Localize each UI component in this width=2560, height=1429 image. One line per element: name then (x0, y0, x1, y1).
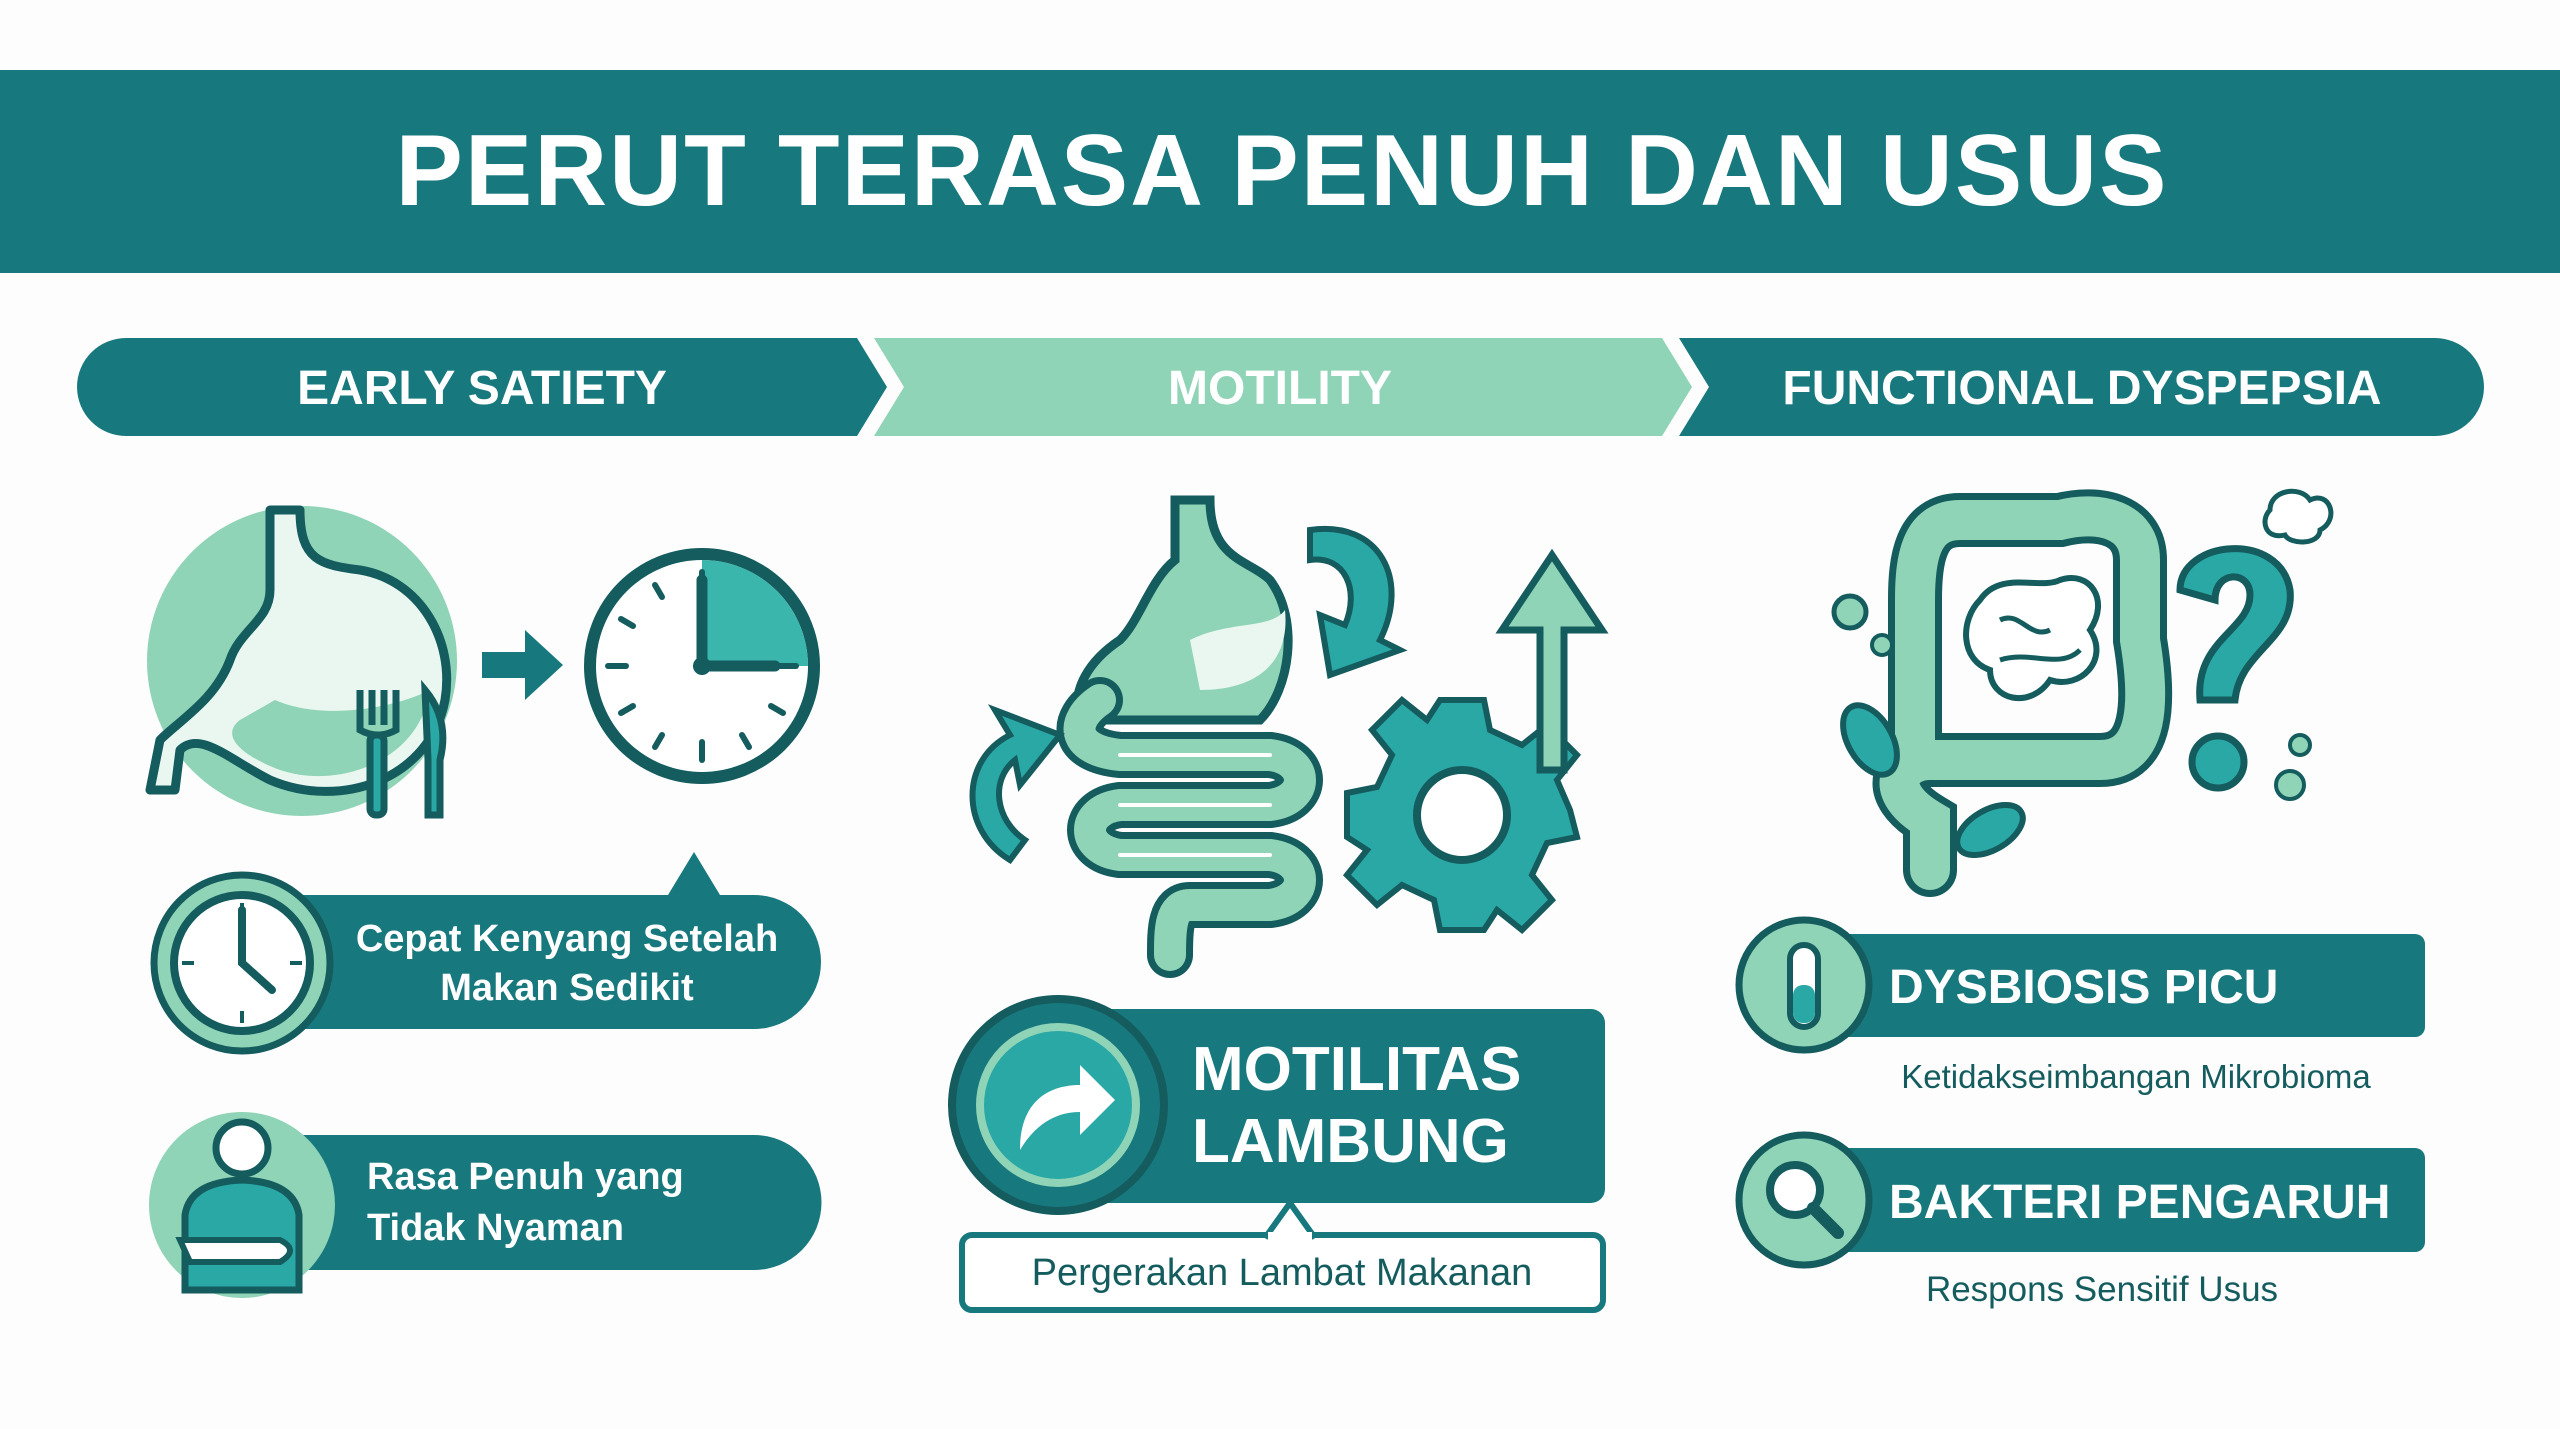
callout: motilitas lambung (952, 999, 1605, 1211)
icon: intestine with question mark and bacteria (1832, 491, 2331, 870)
text: ketidakseimbangan: Ketidakseimbangan Mikrobioma (1901, 1058, 2371, 1095)
title band (0, 70, 2560, 273)
callout: motilitas lambung: MOTILITAS (1192, 1035, 1521, 1104)
icon: small clock (154, 875, 330, 1051)
arrow: stomach to clock (482, 630, 563, 700)
chevron: motility (874, 338, 1692, 436)
chevron: early satiety: EARLY SATIETY (297, 362, 667, 415)
chevron: functional dyspepsia (1679, 338, 2484, 436)
icon: test tube (1739, 920, 1869, 1050)
pill: rasa penuh: Tidak Nyaman (367, 1207, 624, 1249)
pill: rasa penuh (149, 1112, 822, 1298)
chevron: early satiety (77, 338, 887, 436)
chevron: motility: MOTILITY (1168, 362, 1392, 415)
pill: dysbiosis picu (1739, 920, 2425, 1050)
text: respons sensitif usus: Respons Sensitif Usus (1926, 1270, 2278, 1309)
icon: stomach with cutlery (147, 506, 457, 816)
icon: stomach and intestine motility (972, 500, 1602, 955)
icon: person holding stomach (149, 1112, 335, 1298)
callout: pergerakan lambat makanan (962, 1203, 1603, 1310)
pill: rasa penuh: Rasa Penuh yang (367, 1156, 684, 1198)
pill: cepat kenyang (154, 852, 821, 1051)
icon: forward arrow circle (952, 999, 1164, 1211)
pill: bakteri pengaruh (1739, 1135, 2425, 1265)
pill: cepat kenyang: Makan Sedikit (440, 967, 694, 1009)
icon: clock (590, 554, 814, 778)
pill: cepat kenyang: Cepat Kenyang Setelah (356, 918, 778, 960)
callout: pergerakan lambat makanan: Pergerakan Lambat Makanan (1032, 1252, 1532, 1294)
chevron: functional dyspepsia: FUNCTIONAL DYSPEPSIA (1782, 362, 2382, 415)
pill: bakteri pengaruh: BAKTERI PENGARUH (1889, 1176, 2390, 1229)
icon: magnifier (1739, 1135, 1869, 1265)
chevron bar (77, 338, 2484, 436)
callout: motilitas lambung: LAMBUNG (1192, 1107, 1509, 1176)
title band: PERUT TERASA PENUH DAN USUS (395, 115, 2169, 227)
pill: dysbiosis picu: DYSBIOSIS PICU (1889, 961, 2278, 1014)
